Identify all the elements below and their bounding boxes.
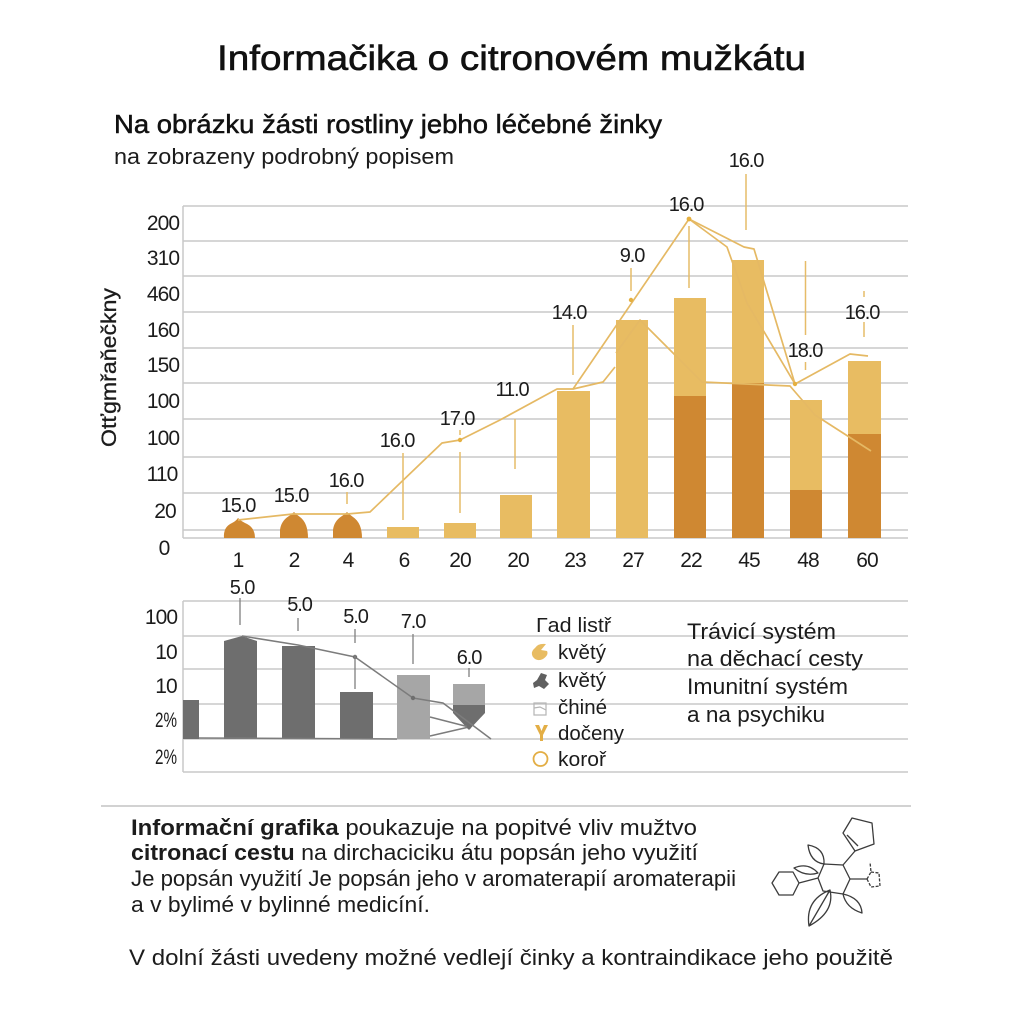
data labels: 16.0 [669,194,704,216]
legend [532,615,624,771]
x axis labels [233,549,878,572]
x axis labels: 20 [507,549,529,572]
lower y axis labels: 10 [155,675,177,698]
icon: Y shape [535,725,548,741]
y axis labels: 150 [147,354,179,377]
data labels: 14.0 [552,302,587,324]
data labels: 11.0 [495,379,529,401]
data labels: 18.0 [788,340,823,362]
icon: grey flower [533,673,549,689]
description text: a v bylimé v bylinné medicíní. [131,892,430,917]
main bar and line chart [98,150,908,572]
data labels: 9.0 [620,245,645,267]
lower y axis labels [145,606,177,769]
footer note: V dolní žásti uvedeny možné vedlejí činky a kontraindikace jeho použitě [129,945,893,970]
subtitle heading: na zobrazeny podrobný popisem [114,144,454,169]
leader lines [347,174,864,520]
lower data labels [230,577,482,669]
x axis labels: 45 [738,549,760,572]
x axis labels: 2 [289,549,300,572]
data labels: 16.0 [329,470,364,492]
lower data labels: 7.0 [401,611,426,633]
text block: body systems [687,619,863,727]
data labels [221,150,880,517]
x axis labels: 4 [343,549,355,572]
data labels: 17.0 [440,408,475,430]
y axis title: Otťgmřaňečkny [98,287,121,447]
legend: Гad listř [536,615,612,637]
lower y axis labels: 2% [155,746,177,769]
description text [131,815,736,917]
text block: body systems: na děchací cesty [687,646,863,671]
subtitle heading [114,109,662,169]
y axis labels: 460 [147,283,179,306]
lower data labels: 5.0 [230,577,255,599]
y axis labels: 0 [159,537,170,560]
lower data labels: 5.0 [287,594,313,616]
y axis labels: 100 [147,427,179,450]
icon: ring [534,752,548,766]
description text: citronací cestu na dirchaciciku átu popsán jeho využití [131,840,698,865]
icon: orange flower [532,644,548,660]
data labels: 15.0 [221,495,256,517]
text block: body systems: a na psychiku [687,702,825,727]
lower grey chart [145,577,908,772]
description text: Informační grafika poukazuje na popitvé vliv mužtvo [131,815,697,840]
x axis labels: 1 [233,549,244,572]
y axis labels: 100 [147,390,179,413]
legend: dočeny [558,723,624,745]
description text: Je popsán využití Je popsán jeho v aromaterapií aromaterapii [131,866,736,891]
y axis labels: 160 [147,319,179,342]
x axis labels: 22 [680,549,702,572]
lower y axis labels: 10 [155,641,177,664]
data labels: 16.0 [845,302,880,324]
x axis labels: 27 [622,549,644,572]
legend: koroř [558,749,607,771]
icon: outlined square [534,703,546,715]
data labels: 16.0 [729,150,764,172]
data labels: 15.0 [274,485,309,507]
lower data labels: 5.0 [343,606,369,628]
icon: molecule with leaves [772,818,880,926]
x axis labels: 60 [856,549,878,572]
y axis labels: 310 [147,247,179,270]
x axis labels: 23 [564,549,586,572]
title: Informačika o citronovém mužkátu [217,39,806,78]
lower trend lines [199,636,491,739]
y axis labels: 20 [154,500,176,523]
legend: čhiné [558,697,607,719]
y axis labels: 110 [147,463,178,486]
legend: květý [558,642,606,664]
data labels: 16.0 [380,430,415,452]
text block: body systems: Trávicí systém [687,619,836,644]
y axis labels [147,212,179,560]
text block: body systems: Imunitní systém [687,674,848,699]
trend lines [238,217,871,520]
lower y axis labels: 2% [155,709,177,732]
bars [224,260,881,538]
lower bars [183,636,485,739]
x axis labels: 6 [399,549,410,572]
lower data labels: 6.0 [457,647,482,669]
legend: květý [558,670,606,692]
lower y axis labels: 100 [145,606,177,629]
subtitle heading: Na obrázku žásti rostliny jebho léčebné žinky [114,109,662,139]
x axis labels: 48 [797,549,819,572]
lower leader lines [240,598,469,689]
y axis labels: 200 [147,212,179,235]
x axis labels: 20 [449,549,471,572]
